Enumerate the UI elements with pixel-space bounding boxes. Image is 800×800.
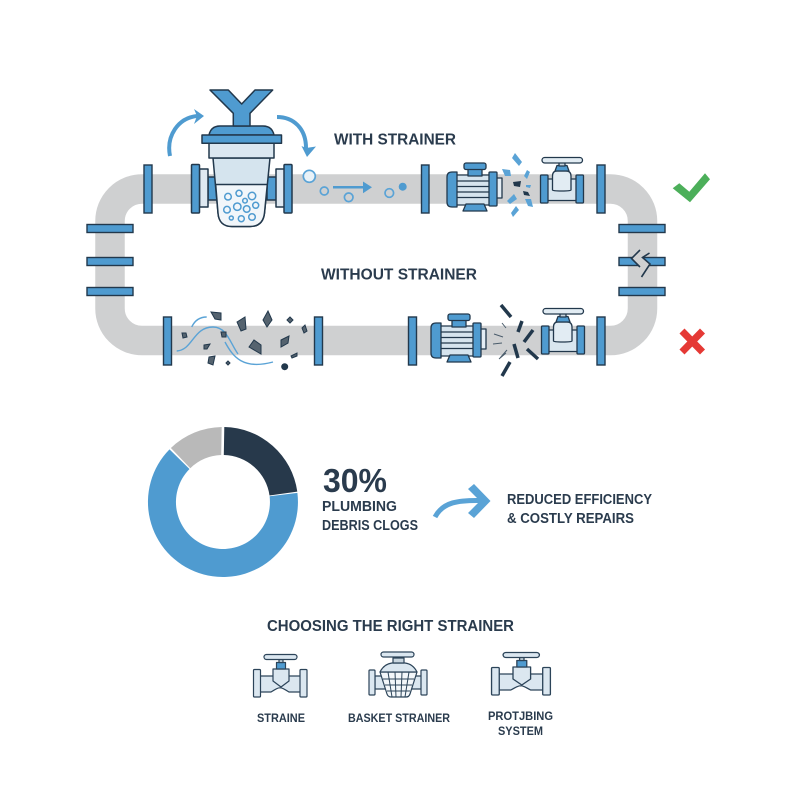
stat: 30% plumbing debris clogs: PLUMBING <box>322 499 397 515</box>
stat: 30% plumbing debris clogs: DEBRIS CLOGS <box>322 518 418 534</box>
icon: strainer <box>192 90 292 226</box>
heading: without strainer: WITHOUT STRAINER <box>321 266 477 284</box>
text: consequence: & COSTLY REPAIRS <box>507 511 634 527</box>
icon: system valve <box>492 652 550 695</box>
label: protjbing system <box>488 711 553 738</box>
arrow: flow into strainer <box>169 109 204 156</box>
icon: valve, with strainer <box>540 158 584 203</box>
icon: pump, with strainer <box>447 163 502 211</box>
icon: valve, without strainer <box>542 308 584 354</box>
arrow: consequence <box>435 484 490 518</box>
heading: with strainer: WITH STRAINER <box>334 132 456 148</box>
icon: pump, without strainer <box>431 314 486 362</box>
text: consequence: REDUCED EFFICIENCY <box>507 492 652 508</box>
heading: choosing the right strainer: CHOOSING THE RIGHT STRAINER <box>267 618 514 635</box>
arrow: flow out of strainer <box>277 117 316 157</box>
label: protjbing system: SYSTEM <box>498 726 543 738</box>
donut chart <box>148 427 298 577</box>
pipe flanges <box>87 165 665 365</box>
icon: basket strainer <box>369 652 427 697</box>
debris flow: particles and currents <box>177 311 307 370</box>
stat: 30% plumbing debris clogs <box>322 462 418 534</box>
fine particles near pump <box>502 153 533 217</box>
stat: 30% plumbing debris clogs: 30% <box>323 462 387 499</box>
pump failure fragments <box>493 305 538 376</box>
icon: cross mark <box>682 331 702 352</box>
strainer debris bubbles <box>224 190 259 222</box>
icon: pipe crack <box>632 250 650 277</box>
label: basket strainer: BASKET STRAINER <box>348 713 451 725</box>
pipe loop <box>110 189 642 340</box>
clean flow: bubbles and arrow <box>303 170 407 202</box>
text: consequence <box>507 492 652 527</box>
icon: check mark <box>673 173 710 202</box>
label: protjbing system: PROTJBING <box>488 711 553 723</box>
icon: strainer valve <box>254 654 307 697</box>
label: straine: STRAINE <box>257 713 305 725</box>
